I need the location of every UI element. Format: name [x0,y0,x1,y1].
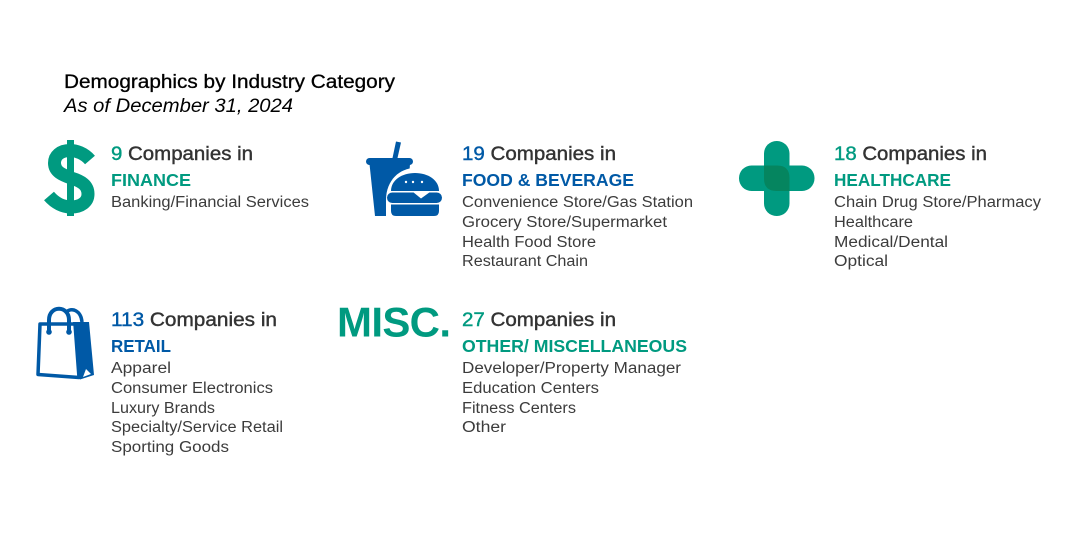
misc list [462,360,681,436]
misc list: Education Centers [462,380,599,397]
misc heading: 27 Companies in [462,310,616,331]
food list: Health Food Store [462,234,596,251]
healthcare list: Healthcare [834,214,913,231]
retail list: Sporting Goods [111,439,229,456]
icon: shopping bag [38,309,94,380]
panel: retail [38,309,283,456]
misc category: OTHER/ MISCELLANEOUS [462,336,687,356]
retail list: Specialty/Service Retail [111,419,283,436]
panel: other and miscellaneous [337,298,687,436]
icon: medical cross [739,141,814,216]
title [63,71,395,117]
icon: drink and burger [366,142,442,216]
healthcare list: Chain Drug Store/Pharmacy [834,194,1041,211]
icon: dollar sign [49,140,90,216]
food list: Convenience Store/Gas Station [462,194,693,211]
finance category: FINANCE [111,170,191,190]
food list: Grocery Store/Supermarket [462,214,668,231]
finance heading: 9 Companies in [111,144,253,165]
misc list: Other [462,419,506,436]
healthcare list: Optical [834,253,888,270]
healthcare list: Medical/Dental [834,234,948,251]
food heading: 19 Companies in [462,144,616,165]
icon: MISC. wordmark: MISC. [337,298,451,346]
healthcare list [834,194,1041,270]
finance list: Banking/Financial Services [111,194,309,211]
panel: finance [49,140,309,216]
healthcare category: HEALTHCARE [834,170,951,190]
title: As of December 31, 2024 [63,95,293,117]
panel: healthcare [739,141,1041,270]
retail heading: 113 Companies in [111,310,277,331]
misc list: Fitness Centers [462,400,576,417]
healthcare heading: 18 Companies in [834,144,987,165]
misc list: Developer/Property Manager [462,360,681,377]
retail list: Luxury Brands [111,400,215,417]
retail category: RETAIL [111,336,171,356]
title: Demographics by Industry Category [64,71,395,93]
retail list: Consumer Electronics [111,380,273,397]
retail list [111,360,283,456]
food list: Restaurant Chain [462,253,588,270]
food list [462,194,693,270]
retail list: Apparel [111,360,171,377]
food category: FOOD & BEVERAGE [462,170,634,190]
panel: food and beverage [366,142,693,270]
